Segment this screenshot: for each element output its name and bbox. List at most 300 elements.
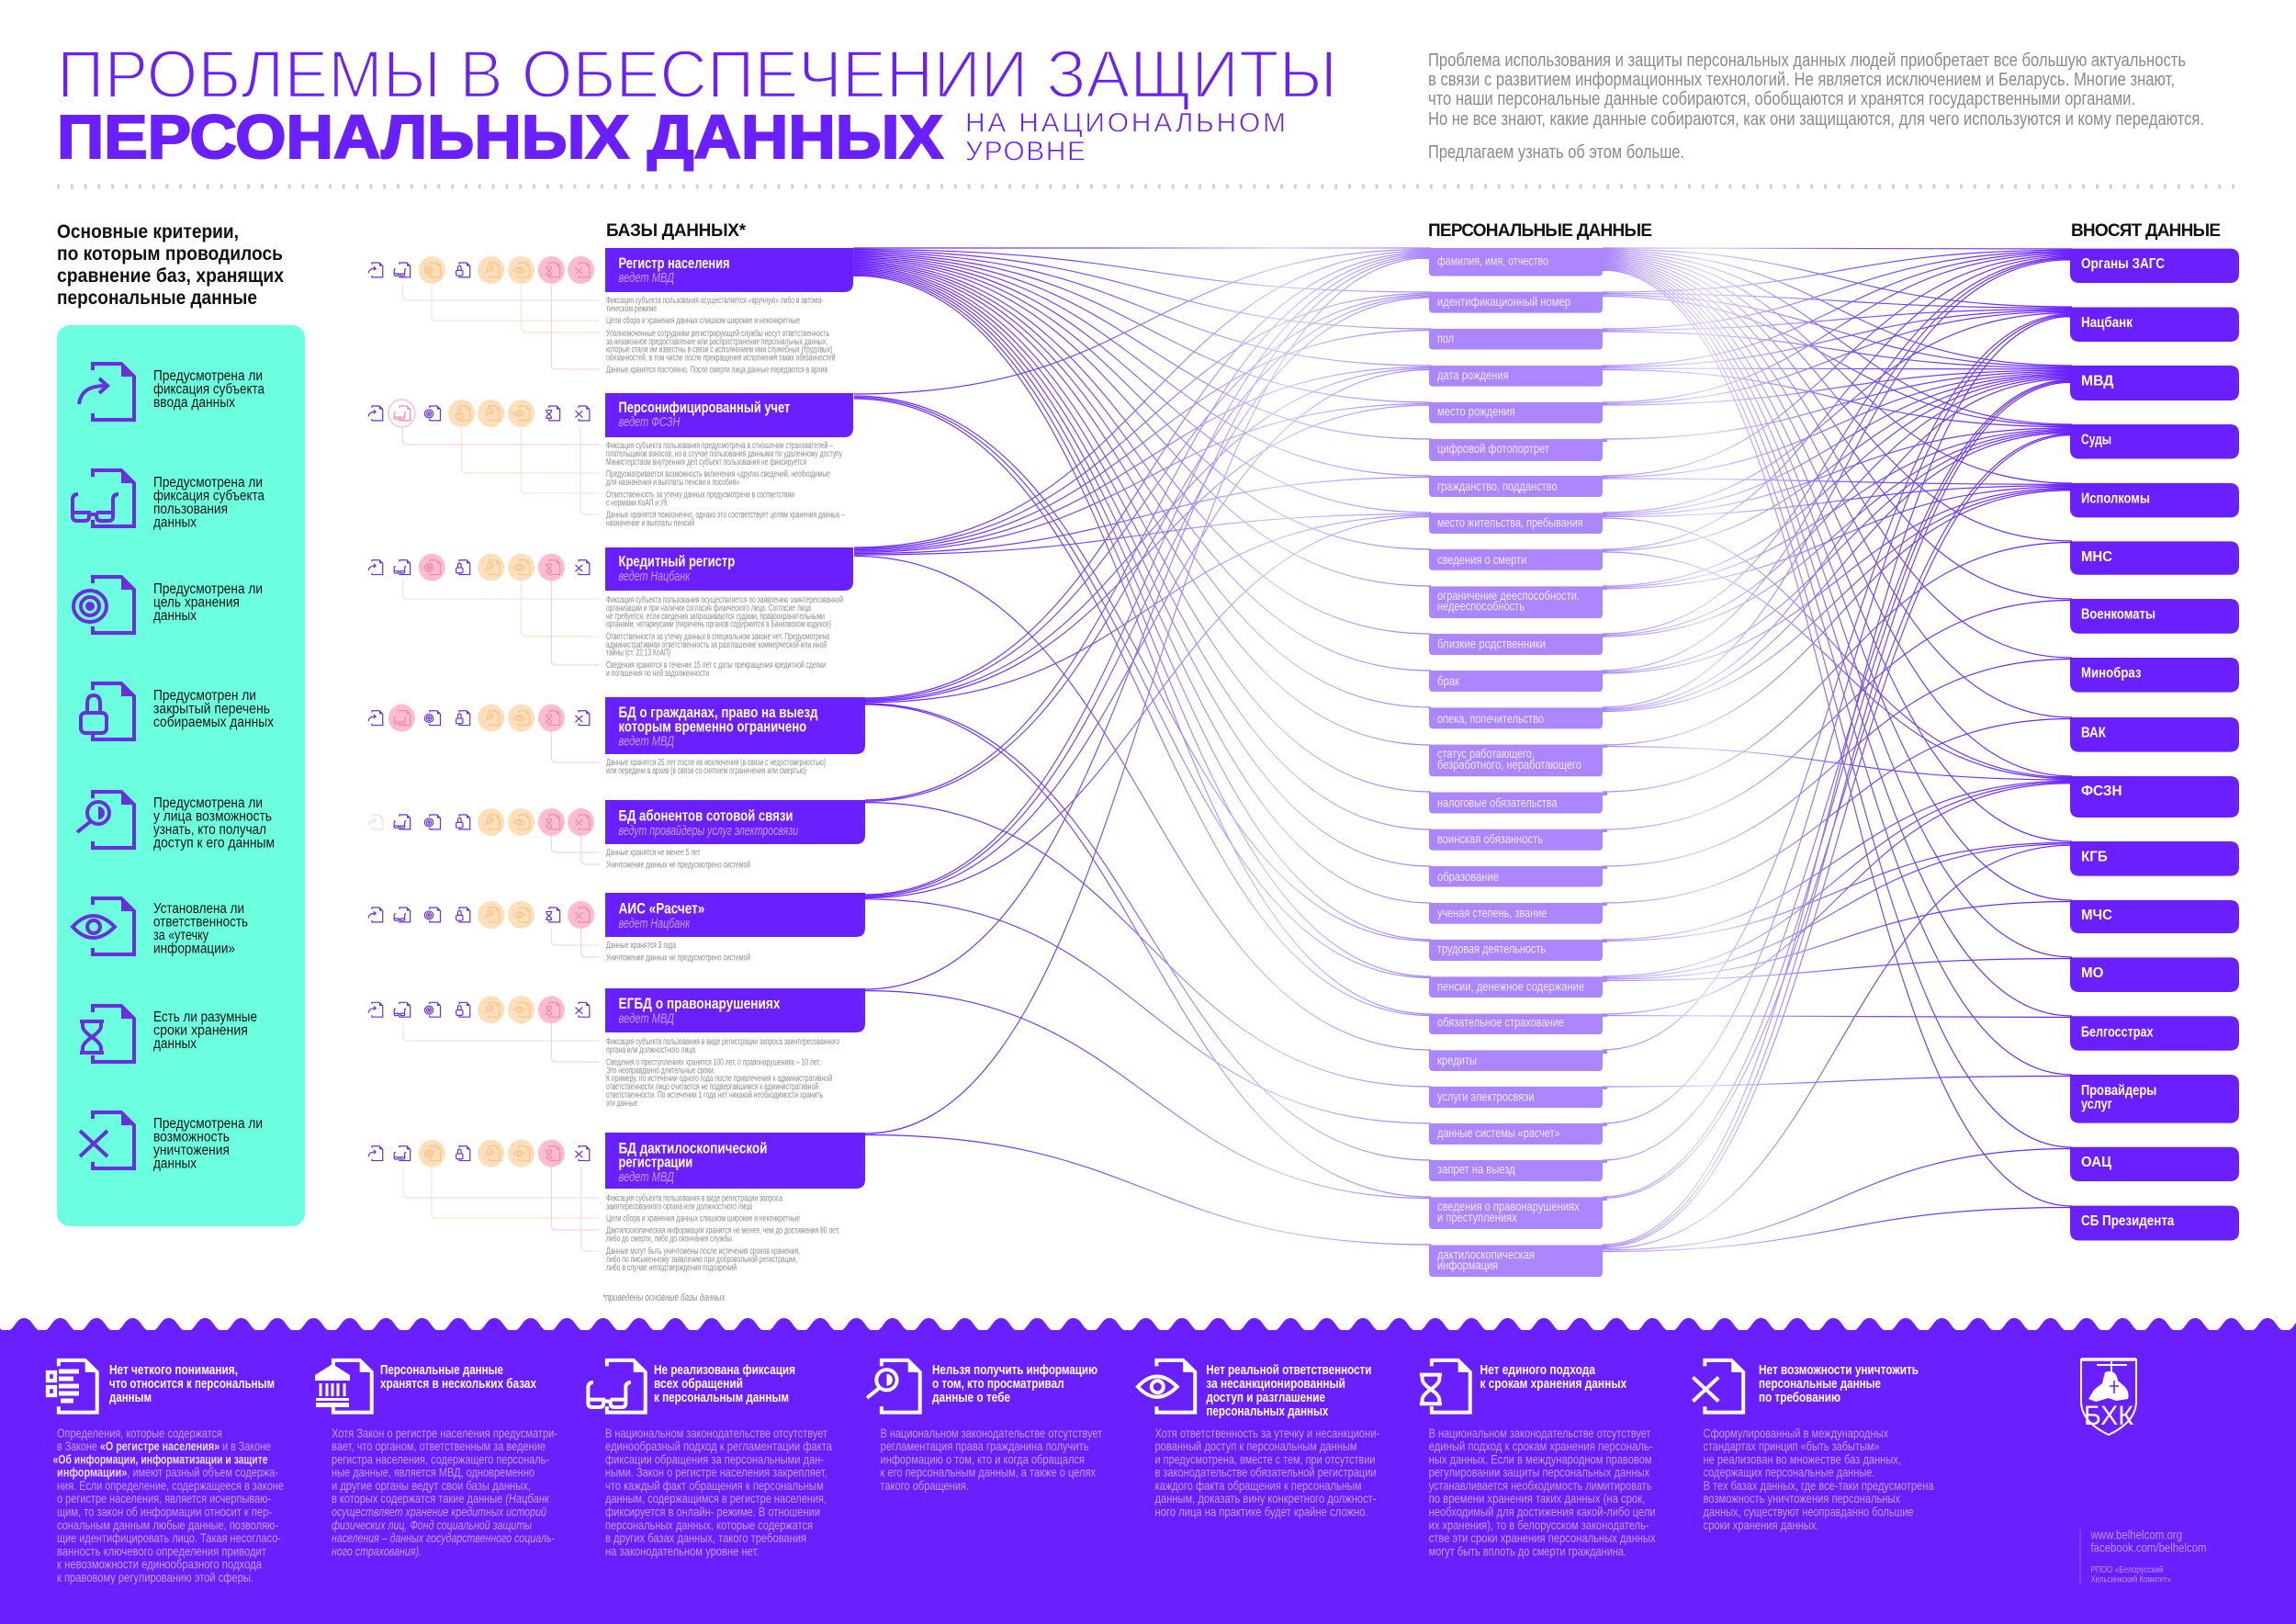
criteria labels: закрытый перечень xyxy=(153,702,270,716)
database: ЕГБД о правонарушениях xyxy=(368,988,865,1109)
body text: персональных данных, которые содержатся xyxy=(605,1517,813,1532)
heading: Нет реальной ответственности xyxy=(1206,1362,1371,1378)
body text: и другие органы ведут свои базы данных, xyxy=(332,1478,531,1493)
notes: либо до смерти, либо до окончания службы xyxy=(606,1233,732,1244)
body text: информации», имеют разный объем содержа- xyxy=(57,1465,278,1480)
body text: устанавливается необходимость лимитировать xyxy=(1429,1478,1652,1493)
criteria labels: за «утечку xyxy=(153,928,208,943)
labels: и преступлениях xyxy=(1437,1210,1517,1224)
body text: информацию о том, кто и когда обращался xyxy=(880,1451,1085,1466)
connector lines xyxy=(403,1167,599,1251)
labels: ВАК xyxy=(2081,726,2106,740)
header box: ведет МВД xyxy=(619,270,674,286)
body text: рованный доступ к персональным данным xyxy=(1155,1438,1357,1453)
icon: document with bank xyxy=(315,1360,372,1413)
labels: недееспособность xyxy=(1437,599,1525,614)
footnote: *приведены основные базы данных xyxy=(602,1292,726,1303)
icon: document with hourglass xyxy=(1420,1360,1470,1413)
criteria labels: собираемых данных xyxy=(153,715,274,730)
body text: в Законе «О регистре населения» и в Законе xyxy=(57,1438,271,1453)
body text: «Об информации, информатизации и защите xyxy=(53,1451,268,1466)
body text xyxy=(1703,1426,1934,1532)
notes: Сведения о преступлениях хранятся 100 лет, о правонарушениях – 10 лет. xyxy=(606,1058,821,1067)
labels: МО xyxy=(2081,965,2103,981)
body text: ного лица на практике будет крайне сложно. xyxy=(1155,1505,1368,1519)
database: Персонифицированный учет xyxy=(368,393,853,529)
body text xyxy=(1429,1426,1656,1558)
body text xyxy=(880,1426,1103,1493)
header box: БД о гражданах, право на выезд xyxy=(619,704,818,721)
labels: цифровой фотопортрет xyxy=(1437,441,1549,456)
header box xyxy=(605,1133,865,1189)
labels: МНС xyxy=(2081,549,2112,565)
body text: ных данных. Если в международном правовом xyxy=(1429,1451,1652,1466)
notes: ответственности лицо считается не подвергавшимся к административной xyxy=(606,1082,818,1092)
body text: В национальном законодательстве отсутствует xyxy=(1429,1426,1651,1440)
criteria labels: Установлена ли xyxy=(153,901,244,917)
notes: Данные хранятся не менее 5 лет xyxy=(606,848,701,858)
body text: фиксации обращения за персональными дан- xyxy=(605,1451,824,1466)
icon: document with magnifier xyxy=(867,1360,920,1413)
criteria labels xyxy=(153,368,275,1172)
criteria labels: Предусмотрена ли xyxy=(153,581,263,597)
labels: близкие родственники xyxy=(1437,636,1546,650)
criteria heading xyxy=(57,221,284,309)
notes: Данные хранятся 25 лет после их исключения (в связи с недостоверностью) xyxy=(606,758,826,768)
labels: Органы ЗАГС xyxy=(2081,256,2165,272)
labels: образование xyxy=(1437,869,1499,884)
labels: опека, попечительство xyxy=(1437,711,1544,726)
criteria labels: Предусмотрена ли xyxy=(153,368,263,384)
header box: Регистр населения xyxy=(619,254,729,272)
body text: такого обращения. xyxy=(880,1478,969,1493)
labels: услуг xyxy=(2081,1097,2112,1112)
criteria labels: узнать, кто получал xyxy=(153,822,266,838)
body text xyxy=(1155,1426,1379,1519)
notes: или передачи в архив (в связи со снятием ограничения или смертью) xyxy=(606,766,806,776)
body text xyxy=(53,1426,284,1585)
body text: осуществляет хранение кредитных историй xyxy=(332,1505,546,1519)
notes: Цели сбора и хранения данных слишком широкие и неконкретные xyxy=(606,1212,800,1224)
criteria labels: Предусмотрена ли xyxy=(153,475,263,491)
footer band xyxy=(0,1318,2296,1624)
notes: эти данные. xyxy=(606,1099,639,1109)
notes: обязанностей, в том числе после прекращения исполнения таких обязанностей xyxy=(606,353,836,364)
body text: Хотя Закон о регистре населения предусматри- xyxy=(332,1426,557,1440)
labels: сведения о правонарушениях xyxy=(1437,1199,1580,1213)
heading: всех обращений xyxy=(654,1376,743,1392)
icon: document with glasses xyxy=(588,1360,646,1413)
labels: Провайдеры xyxy=(2081,1083,2156,1099)
labels: ОАЦ xyxy=(2081,1155,2112,1170)
body text: данным, содержащимся в регистре населения, xyxy=(605,1491,827,1506)
body text: и предусмотрена, вместе с тем, при отсутствии xyxy=(1155,1451,1376,1466)
notes: Уполномоченные сотрудники регистрирующей службы несут ответственность xyxy=(606,328,829,339)
notes: Фиксация субъекта пользования предусмотрена в отношении страхователей – xyxy=(606,440,833,451)
database: БД о гражданах xyxy=(368,697,865,776)
labels: КГБ xyxy=(2081,849,2108,864)
body text: могут быть вплоть до смерти гражданина. xyxy=(1429,1543,1626,1558)
body text: Хотя ответственность за утечку и несанкциони- xyxy=(1155,1426,1379,1440)
header box: ведет Нацбанк xyxy=(619,916,691,931)
header box xyxy=(605,988,865,1032)
criteria labels: данных xyxy=(153,1036,197,1052)
notes xyxy=(606,848,750,871)
contributors list xyxy=(2044,249,2239,1241)
heading: к персональным данным xyxy=(654,1390,789,1405)
heading: к срокам хранения данных xyxy=(1480,1376,1627,1392)
notes xyxy=(606,1192,839,1273)
notes: Сведения хранятся в течение 15 лет с даты прекращения кредитной сделки xyxy=(606,660,826,671)
criteria labels: Предусмотрена ли xyxy=(153,795,263,811)
icon: document with eye xyxy=(1138,1360,1195,1413)
problem 7 xyxy=(1693,1360,1934,1532)
body text: о регистре населения, является исчерпываю- xyxy=(57,1491,271,1506)
labels: место жительства, пребывания xyxy=(1437,514,1583,529)
criteria labels: у лица возможность xyxy=(153,808,272,825)
contacts: www.belhelcom.org xyxy=(2090,1527,2182,1541)
notes: Фиксация субъекта пользования в виде регистрации запроса xyxy=(606,1192,782,1203)
labels: воинская обязанность xyxy=(1437,831,1543,846)
labels: МВД xyxy=(2081,373,2113,389)
labels: данные системы «расчет» xyxy=(1437,1125,1560,1140)
notes: Данные хранятся 3 года xyxy=(606,941,676,951)
heading: Нельзя получить информацию xyxy=(932,1362,1097,1378)
body text: в других базах данных, такого требования xyxy=(605,1530,806,1545)
body text: фиксируется в онлайн- режиме. В отношении xyxy=(605,1505,820,1519)
notes: Дактилоскопическая информация хранится не менее, чем до достижения 80 лет, xyxy=(606,1225,839,1236)
header box: БД абонентов сотовой связи xyxy=(619,806,793,825)
labels: запрет на выезд xyxy=(1437,1161,1515,1176)
notes xyxy=(606,594,843,679)
labels: Белгосстрах xyxy=(2081,1024,2154,1040)
column headings: БАЗЫ ДАННЫХ* xyxy=(606,221,747,241)
heading: по требованию xyxy=(1759,1390,1840,1405)
problem 3 xyxy=(588,1360,832,1558)
labels: фамилия, имя, отчество xyxy=(1437,254,1548,268)
body text: по времени хранения таких данных (на срок, xyxy=(1429,1491,1645,1506)
notes: за незаконное предоставление или распространение персональных данных, xyxy=(606,337,827,347)
logo: БХК xyxy=(2084,1401,2133,1431)
heading xyxy=(1206,1362,1371,1419)
body text: к правовому регулированию этой сферы. xyxy=(57,1570,253,1585)
notes: Фиксация субъекта пользования осуществляется по заявлению заинтересованной xyxy=(606,594,843,605)
notes: либо по письменному заявлению при добровольной регистрации, xyxy=(606,1254,797,1265)
intro text xyxy=(1428,51,2204,163)
heading: хранятся в нескольких базах xyxy=(380,1376,537,1392)
notes: Уничтожение данных не предусмотрено системой xyxy=(606,953,750,963)
heading: данным xyxy=(109,1390,152,1405)
criteria labels: сроки хранения xyxy=(153,1023,248,1038)
body text: единый подход к срокам хранения персональ- xyxy=(1429,1438,1653,1453)
header box: ЕГБД о правонарушениях xyxy=(619,995,781,1012)
connector lines xyxy=(402,427,599,514)
header box: ведет МВД xyxy=(619,1169,674,1185)
problem 5 xyxy=(1138,1360,1379,1519)
contacts xyxy=(2080,1527,2206,1585)
notes: Данные хранятся пожизненно, однако это соответствует целям хранения данных – xyxy=(606,511,845,520)
database: БД дактилоскопической регистрации xyxy=(368,1133,865,1273)
notes: Данные хранятся постоянно. После смерти лица данные передаются в архив xyxy=(606,366,827,375)
notes: Цели сбора и хранения данных слишком широкие и неконкретные xyxy=(606,315,800,326)
connector lines xyxy=(551,928,599,957)
notes: для назначения и выплаты пенсии и пособия» xyxy=(606,477,739,488)
contacts: facebook.com/belhelcom xyxy=(2090,1539,2206,1554)
header box: ведет МВД xyxy=(619,1010,674,1027)
notes: Это неоправданно длительные сроки. xyxy=(606,1066,715,1077)
criteria labels: ответственность xyxy=(153,915,248,930)
body text: стандартах принцип «быть забытым» xyxy=(1703,1438,1880,1453)
notes: плательщиков взносов, но в случае пользования данными по удаленному доступу xyxy=(606,449,842,459)
body text: к невозможности единообразного подхода xyxy=(57,1557,262,1572)
database: Кредитный регистр xyxy=(368,547,853,679)
labels: сведения о смерти xyxy=(1437,552,1526,567)
problem 1 xyxy=(48,1360,284,1585)
icon: document with list xyxy=(48,1360,97,1413)
labels: услуги электросвязи xyxy=(1437,1089,1535,1104)
header box: БД дактилоскопической xyxy=(619,1140,768,1157)
labels: дата рождения xyxy=(1437,367,1508,382)
notes xyxy=(606,1036,839,1109)
criteria labels: информации» xyxy=(153,942,235,957)
body text: щим, то закон об информации относит к пер- xyxy=(57,1505,272,1519)
notes: с нормами КоАП и УК xyxy=(606,498,668,509)
labels: брак xyxy=(1437,673,1460,688)
notes: организации и при наличии согласия физического лица. Согласие лица xyxy=(606,603,811,614)
boxes xyxy=(1429,248,1607,1277)
labels: ученая степень, звание xyxy=(1437,905,1548,919)
body text: данных, существуют неоправданно большие xyxy=(1703,1505,1914,1519)
problem 6 xyxy=(1420,1360,1656,1558)
criteria icons row xyxy=(368,996,590,1023)
body text xyxy=(332,1426,557,1558)
heading: персональные данные xyxy=(1759,1376,1881,1392)
header box: Кредитный регистр xyxy=(619,553,735,570)
criteria labels: фиксация субъекта xyxy=(153,382,264,397)
criteria icons row xyxy=(368,400,590,427)
body text: регистра населения, содержащего персональ- xyxy=(332,1451,549,1466)
labels: Минобраз xyxy=(2081,665,2142,682)
heading: Не реализована фиксация xyxy=(654,1362,795,1378)
notes: Данные могут быть уничтожены после истечения сроков хранения, xyxy=(606,1246,800,1257)
notes: Фиксация субъекта пользования осуществляется «вручную» либо в автома- xyxy=(606,295,823,306)
body text: возможность уничтожения персональных xyxy=(1703,1491,1900,1506)
labels: трудовая деятельность xyxy=(1437,941,1546,955)
header box: регистрации xyxy=(619,1154,692,1171)
notes: либо в случае неподтверждения подозрений xyxy=(606,1262,737,1273)
header box xyxy=(605,547,853,591)
criteria labels: доступ к его данным xyxy=(153,836,275,851)
labels: Суды xyxy=(2081,432,2111,448)
header box xyxy=(605,697,865,754)
header box xyxy=(605,393,853,437)
labels: налоговые обязательства xyxy=(1437,795,1558,810)
criteria icons row xyxy=(368,705,590,732)
notes: административная ответственность за разглашение коммерческой или иной xyxy=(606,640,827,650)
personal data list xyxy=(1401,248,1629,1277)
problem 4 xyxy=(867,1360,1103,1493)
boxes xyxy=(2070,249,2239,1241)
flow lines: databases to personal data xyxy=(854,248,1431,1245)
notes: К примеру, по истечении одного года после привлечения к административной xyxy=(606,1074,832,1084)
body text: регламентация права гражданина получить xyxy=(880,1438,1089,1453)
icon: document with cross xyxy=(1693,1360,1743,1413)
body text: в которых содержатся такие данные (Нацбанк xyxy=(332,1491,550,1506)
contacts: РПОО «Белорусский xyxy=(2090,1564,2164,1575)
labels: пол xyxy=(1437,331,1454,345)
criteria labels: возможность xyxy=(153,1130,230,1145)
database: БД абонентов сотовой связи xyxy=(368,800,865,871)
notes: и погашения по ней задолженности xyxy=(606,669,709,679)
notes: Министерством внутренних дел субъект пользования не фиксируется xyxy=(606,457,806,468)
heading: доступ и разглашение xyxy=(1206,1390,1325,1405)
labels: МЧС xyxy=(2081,908,2112,923)
notes: которые стали им известны в связи с исполнением ими служебных (трудовых) xyxy=(606,344,832,355)
column headings: ПЕРСОНАЛЬНЫЕ ДАННЫЕ xyxy=(1428,221,1652,241)
criteria labels: данных xyxy=(153,608,197,624)
labels: дактилоскопическая xyxy=(1437,1246,1535,1261)
criteria labels: ввода данных xyxy=(153,395,235,411)
connector lines xyxy=(402,581,599,665)
title: ПЕРСОНАЛЬНЫХ ДАННЫХ xyxy=(57,103,943,172)
body text: В национальном законодательстве отсутствует xyxy=(880,1426,1103,1440)
notes: Уничтожение данных не предусмотрено системой xyxy=(606,860,750,871)
criteria labels: пользования xyxy=(153,502,228,517)
heading xyxy=(1480,1362,1627,1392)
body text xyxy=(605,1426,832,1558)
notes: тическом режиме xyxy=(606,304,657,314)
criteria heading: Основные критерии, xyxy=(57,221,239,242)
body text: ного страхования). xyxy=(332,1543,422,1558)
criteria labels: Есть ли разумные xyxy=(153,1009,257,1025)
notes: Фиксация субъекта пользования в виде регистрации запроса заинтересованного xyxy=(606,1036,839,1047)
connector lines xyxy=(403,1022,599,1062)
body text: что каждый факт обращения к персональным xyxy=(605,1478,824,1493)
connector lines xyxy=(551,836,599,864)
notes: назначение и выплаты пенсий xyxy=(606,518,694,529)
labels: информация xyxy=(1437,1257,1498,1272)
body text: их хранения), то в белорусском законодатель- xyxy=(1429,1517,1649,1532)
database: Регистр населения xyxy=(368,248,886,375)
body text: Определения, которые содержатся xyxy=(57,1426,222,1440)
body text: стве эти сроки хранения персональных данных xyxy=(1429,1530,1656,1545)
labels: ограничение дееспособности, xyxy=(1437,588,1580,603)
notes: Ответственность за утечку данных предусмотрена в соответствии xyxy=(606,491,794,500)
criteria icons row xyxy=(368,808,594,836)
body text: необходимый для достижения какой-либо цели xyxy=(1429,1505,1656,1519)
flow lines: personal data to contributors xyxy=(1603,248,2072,1251)
labels: статус работающего, xyxy=(1437,746,1535,761)
criteria labels: Предусмотрена ли xyxy=(153,1116,263,1132)
labels: кредиты xyxy=(1437,1053,1477,1067)
criteria labels: фиксация субъекта xyxy=(153,489,264,503)
heading: Нет единого подхода xyxy=(1480,1362,1596,1378)
body text: данным, доказать вину конкретного должност- xyxy=(1155,1491,1377,1506)
body text: щие идентифицировать лицо. Такая несогласо- xyxy=(57,1530,281,1545)
header box: АИС «Расчет» xyxy=(619,900,704,917)
labels: Исполкомы xyxy=(2081,491,2150,507)
labels: место рождения xyxy=(1437,404,1515,419)
heading: что относится к персональным xyxy=(109,1376,275,1392)
heading xyxy=(380,1362,537,1392)
title xyxy=(57,38,1337,172)
heading xyxy=(932,1362,1097,1405)
criteria labels: данных xyxy=(153,515,197,531)
heading: Персональные данные xyxy=(380,1362,503,1378)
body text: содержащих персональные данные. xyxy=(1703,1465,1875,1480)
criteria heading: по которым проводилось xyxy=(57,243,283,265)
header box: ведет Нацбанк xyxy=(619,569,691,584)
body text: вает, что органом, ответственным за ведение xyxy=(332,1438,546,1453)
intro text: Предлагаем узнать об этом больше. xyxy=(1428,142,1684,163)
criteria icons row xyxy=(368,901,594,929)
connector lines xyxy=(402,283,599,369)
notes: ответственности. По истечении 1 года нет никакой необходимости хранить xyxy=(606,1089,823,1100)
connector lines xyxy=(551,731,599,762)
heading xyxy=(1759,1362,1919,1405)
column headings xyxy=(606,221,2221,241)
body text: не реализован во множестве баз данных, xyxy=(1703,1451,1901,1466)
header box: ведут провайдеры услуг электросвязи xyxy=(619,823,799,839)
body text: каждого факта обращения к персональным xyxy=(1155,1478,1361,1493)
heading: за несанкционированный xyxy=(1206,1376,1345,1392)
notes: Ответственности за утечку данных в специальном законе нет. Предусмотрена xyxy=(606,632,829,642)
body text: ванность ключевого определения приводит xyxy=(57,1543,266,1558)
title: УРОВНЕ xyxy=(965,136,1086,167)
body text: ными. Закон о регистре населения закрепляет, xyxy=(605,1465,827,1480)
body text: Сформулированный в международных xyxy=(1703,1426,1888,1440)
heading: Нет возможности уничтожить xyxy=(1759,1362,1919,1378)
heading: о том, кто просматривал xyxy=(932,1376,1064,1392)
intro text: что наши персональные данные собираются, обобщаются и хранятся государственными органами. xyxy=(1428,89,2135,109)
header box xyxy=(605,893,865,937)
body text: к его персональным данным, а также о целях xyxy=(880,1465,1096,1480)
header box: которым временно ограничено xyxy=(619,718,806,735)
notes: не требуется, если сведения запрашиваются судами, правоохранительными xyxy=(606,611,825,622)
logo xyxy=(2081,1359,2136,1435)
labels: безработного, неработающего xyxy=(1437,757,1581,772)
notes xyxy=(606,758,826,776)
labels: идентификационный номер xyxy=(1437,294,1570,309)
header box xyxy=(605,248,886,292)
database: АИС «Расчет» xyxy=(368,893,865,963)
heading: Нет четкого понимания, xyxy=(109,1362,238,1378)
header box: ведет МВД xyxy=(619,733,674,750)
title: НА НАЦИОНАЛЬНОМ xyxy=(965,108,1286,138)
body text: населения – данных государственного социаль- xyxy=(332,1530,555,1545)
notes: тайны (ст. 22.13 КоАП) xyxy=(606,648,670,658)
body text: регулировании защиты персональных данных xyxy=(1429,1465,1649,1480)
contacts: Хельсинкский Комитет» xyxy=(2090,1574,2171,1585)
criteria icons row xyxy=(368,1140,590,1167)
body text: ные данные, является МВД, одновременно xyxy=(332,1465,535,1480)
criteria heading: сравнение баз, хранящих xyxy=(57,265,284,287)
criteria icons row xyxy=(368,256,594,284)
notes xyxy=(606,941,750,963)
header box: Персонифицированный учет xyxy=(619,399,790,416)
heading xyxy=(109,1362,275,1405)
criteria heading: персональные данные xyxy=(57,288,257,309)
criteria labels: цель хранения xyxy=(153,595,240,610)
notes xyxy=(606,295,836,375)
labels: Военкоматы xyxy=(2081,606,2155,623)
labels: обязательное страхование xyxy=(1437,1015,1564,1030)
criteria labels: уничтожения xyxy=(153,1143,230,1158)
column headings: ВНОСЯТ ДАННЫЕ xyxy=(2071,221,2221,241)
header box: ведет ФСЗН xyxy=(619,414,681,430)
labels: ФСЗН xyxy=(2081,784,2122,799)
notes: Предусматривается возможность включения «других сведений, необходимые xyxy=(606,468,830,479)
